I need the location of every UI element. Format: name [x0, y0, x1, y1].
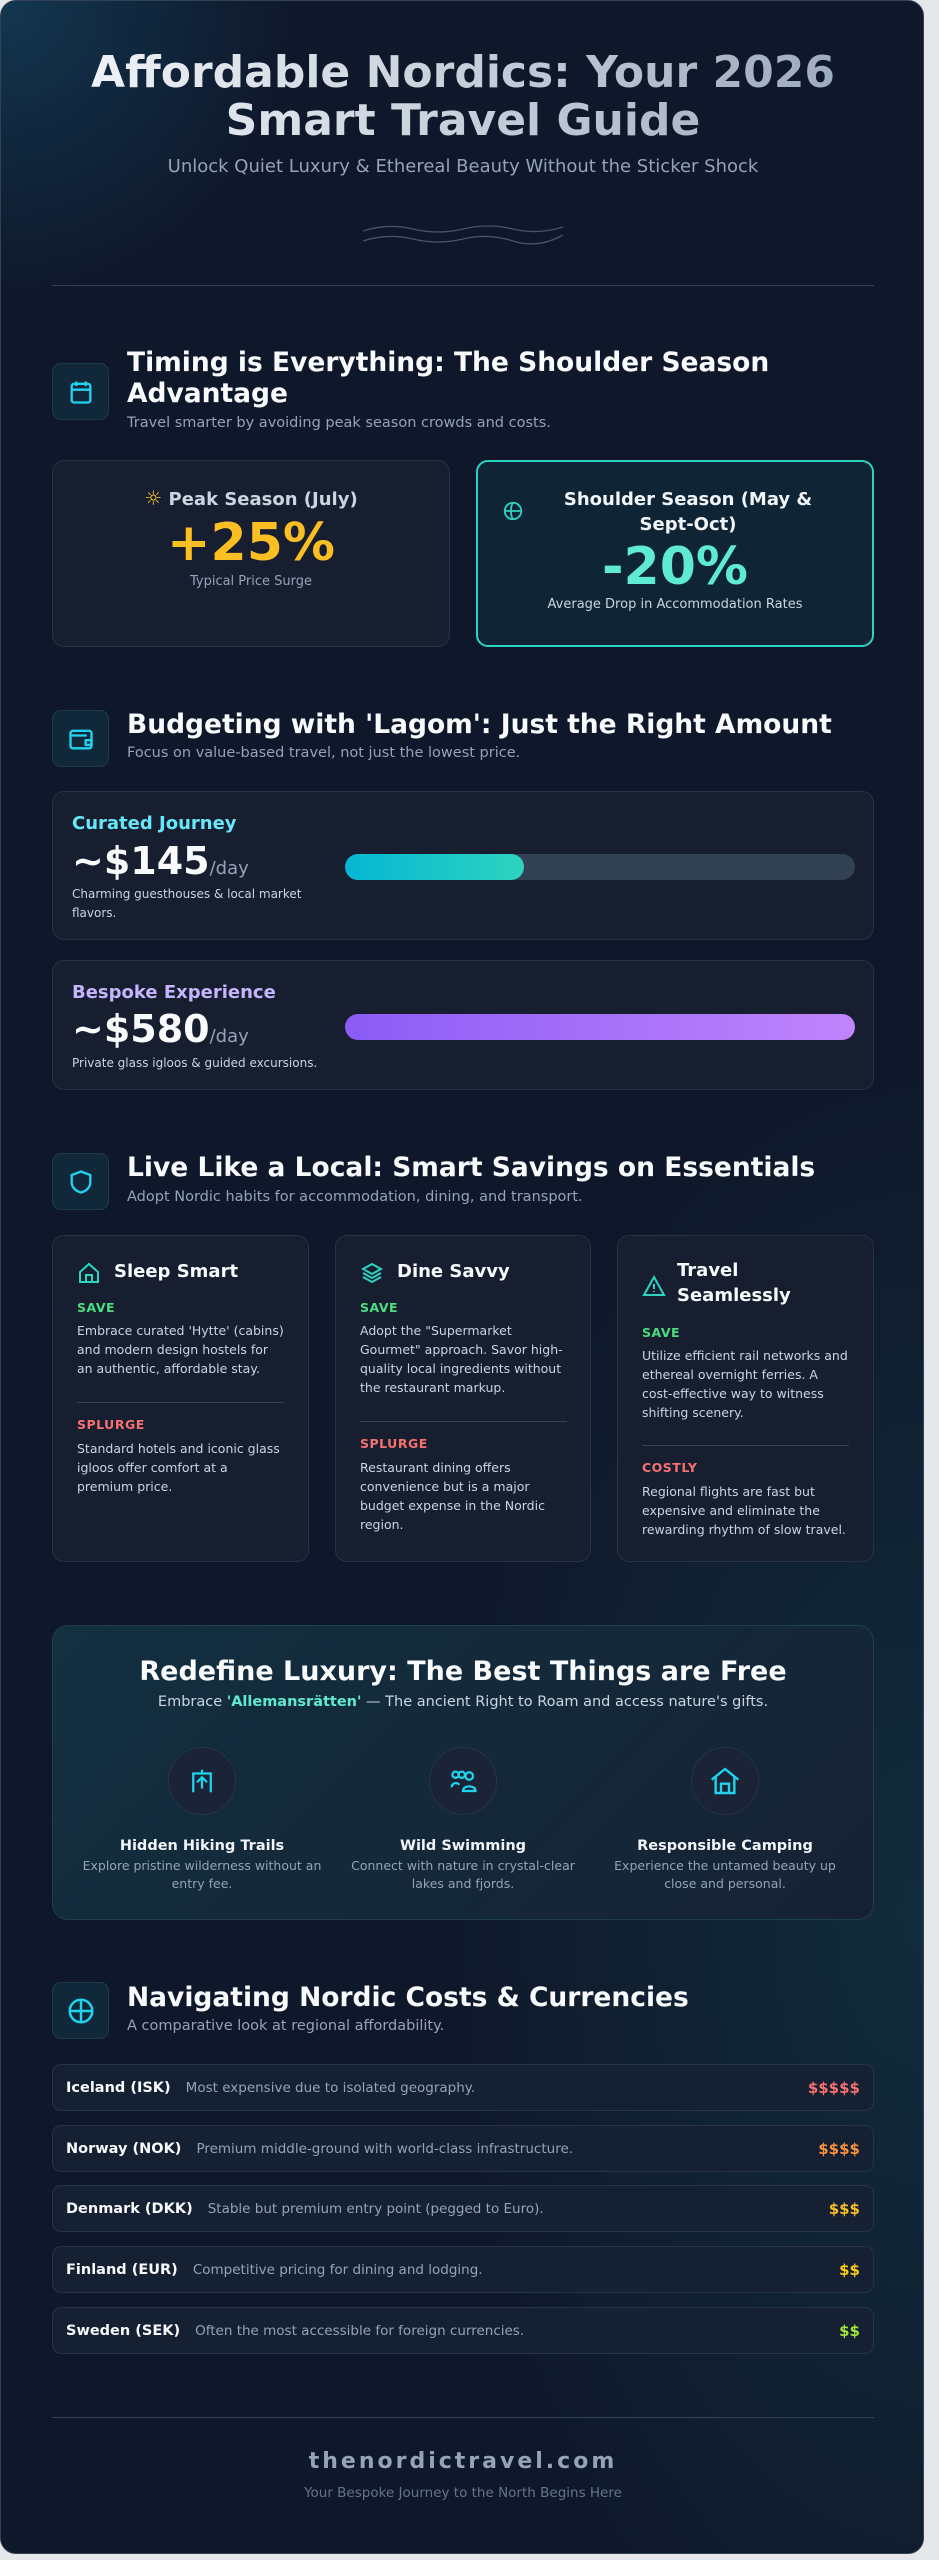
panel: peak season	[52, 460, 450, 647]
item: hiking: Explore pristine wilderness without an entry fee.	[83, 1858, 321, 1891]
panel: redefine luxury	[52, 1625, 874, 1920]
panel: sleep smart: Standard hotels and iconic glass	[77, 1441, 280, 1456]
panel: travel seamlessly	[617, 1235, 874, 1562]
section 5 icon: compass	[52, 1982, 109, 2039]
row: denmark: $$$	[829, 2200, 860, 2218]
panel: bespoke experience: Bespoke Experience	[72, 982, 276, 1003]
bar chart: curated	[345, 854, 855, 880]
section 5 subtitle: A comparative look at regional affordability.	[127, 2018, 444, 2034]
bar chart: bespoke	[345, 1014, 855, 1040]
title: Smart Travel Guide	[226, 95, 700, 146]
section 5 heading: Navigating Nordic Costs & Currencies	[127, 1982, 689, 2013]
row: denmark: Stable but premium entry point (pegged to Euro).	[208, 2200, 544, 2216]
row: denmark: Denmark (DKK)	[66, 2200, 193, 2216]
row: finland: $$	[839, 2260, 860, 2278]
panel: travel seamlessly: Regional flights are fast but expensive and eliminate the rewarding rhythm of slow travel.	[642, 1484, 846, 1537]
panel: sleep smart: Embrace curated 'Hytte' (cabins) and modern design hostels for	[77, 1323, 284, 1357]
panel: sleep smart: premium price.	[77, 1479, 172, 1494]
section 1 icon: calendar	[52, 363, 109, 420]
panel: dine savvy: Adopt the "Supermarket Gourmet" approach. Savor high-quality local ingredients without the restaurant markup.	[360, 1323, 563, 1395]
item: swimming	[351, 1747, 575, 1891]
panel: travel seamlessly: COSTLY	[642, 1460, 697, 1475]
panel: dine savvy	[335, 1235, 591, 1562]
item: camping	[614, 1747, 836, 1891]
panel: travel seamlessly: SAVE	[642, 1325, 680, 1340]
item: swimming: Connect with nature in crystal-clear lakes and fjords.	[351, 1858, 575, 1891]
footer domain: thenordictravel.com	[309, 2449, 617, 2474]
row: sweden: Often the most accessible for foreign currencies.	[195, 2322, 524, 2338]
item: hiking: Hidden Hiking Trails	[120, 1838, 284, 1854]
panel: curated journey	[52, 791, 874, 940]
row: iceland: $$$$$	[808, 2078, 860, 2096]
panel: dine savvy: Restaurant dining offers convenience but is a major budget expense in the Nordic region.	[360, 1460, 545, 1532]
row: norway: $$$$	[818, 2140, 860, 2158]
panel: dine savvy: SAVE	[360, 1300, 398, 1315]
panel: redefine luxury: Embrace 'Allemansrätten' — The ancient Right to Roam and access nature's gifts.	[158, 1694, 768, 1710]
peak number: +25%	[167, 513, 335, 573]
panel: dine savvy: Dine Savvy	[397, 1261, 510, 1282]
peak title: ☼ Peak Season (July)	[144, 486, 358, 510]
section 2 icon: wallet	[52, 710, 109, 767]
panel: shoulder season: Average Drop in Accommodation Rates	[548, 597, 802, 612]
row: iceland: Iceland (ISK)	[66, 2080, 171, 2096]
row: sweden	[52, 2307, 874, 2354]
section 2 subtitle: Focus on value-based travel, not just the lowest price.	[127, 745, 520, 761]
section 1 subtitle: Travel smarter by avoiding peak season crowds and costs.	[127, 415, 551, 431]
panel: sleep smart: Sleep Smart	[114, 1261, 238, 1282]
subtitle: Unlock Quiet Luxury & Ethereal Beauty Without the Sticker Shock	[168, 156, 758, 177]
row: sweden: $$	[839, 2322, 860, 2340]
row: denmark	[52, 2185, 874, 2232]
panel: curated journey: Charming guesthouses & local market flavors.	[72, 887, 301, 920]
section 3 icon: shield	[52, 1153, 109, 1210]
item: swimming: Wild Swimming	[400, 1838, 526, 1854]
row: finland: Finland (EUR)	[66, 2262, 178, 2278]
panel: sleep smart	[52, 1235, 309, 1562]
shoulder title: Shoulder Season (May & Sept-Oct)	[564, 489, 812, 535]
title	[1, 49, 925, 145]
row: norway: Norway (NOK)	[66, 2140, 181, 2156]
item: camping: Responsible Camping	[637, 1838, 813, 1854]
panel: curated journey: ~$145/day	[72, 839, 249, 883]
panel: sleep smart: an authentic, affordable stay.	[77, 1361, 260, 1376]
panel: dine savvy: SPLURGE	[360, 1436, 428, 1451]
panel: curated journey: Curated Journey	[72, 813, 237, 834]
panel: travel seamlessly: Travel	[677, 1260, 738, 1281]
panel: travel seamlessly: Seamlessly	[677, 1285, 791, 1306]
shoulder number: -20%	[602, 537, 748, 597]
panel: travel seamlessly: cost-effective way to witness	[642, 1386, 824, 1401]
section 3 heading: Live Like a Local: Smart Savings on Essentials	[127, 1152, 815, 1183]
footer tagline: Your Bespoke Journey to the North Begins Here	[304, 2485, 622, 2501]
panel: sleep smart: SPLURGE	[77, 1417, 145, 1432]
panel: sleep smart: SAVE	[77, 1300, 115, 1315]
row: iceland	[52, 2064, 874, 2111]
title: Affordable Nordics: Your 2026	[91, 47, 835, 98]
panel: sleep smart: igloos offer comfort at a	[77, 1460, 228, 1475]
item: hiking	[83, 1747, 321, 1891]
row: norway	[52, 2125, 874, 2172]
row: finland: Competitive pricing for dining and lodging.	[193, 2262, 483, 2278]
icon: decorative waves	[363, 225, 563, 244]
row: norway: Premium middle-ground with world-class infrastructure.	[196, 2140, 573, 2156]
section 1 heading: Timing is Everything: The Shoulder Season Advantage	[127, 347, 769, 409]
icon: globe leaf	[504, 502, 522, 520]
row: finland	[52, 2246, 874, 2293]
panel: travel seamlessly: Utilize efficient rail networks and	[642, 1348, 848, 1363]
panel: bespoke experience	[52, 960, 874, 1090]
panel: travel seamlessly: ethereal overnight ferries. A	[642, 1367, 818, 1382]
panel: travel seamlessly: shifting scenery.	[642, 1405, 744, 1420]
row: iceland: Most expensive due to isolated geography.	[186, 2080, 475, 2096]
item: camping: Experience the untamed beauty up close and personal.	[614, 1858, 836, 1891]
section 3 subtitle: Adopt Nordic habits for accommodation, dining, and transport.	[127, 1189, 583, 1205]
panel: peak season: Typical Price Surge	[190, 574, 312, 589]
section 2 heading: Budgeting with 'Lagom': Just the Right Amount	[127, 709, 832, 740]
luxury heading: Redefine Luxury: The Best Things are Free	[139, 1656, 787, 1687]
panel: shoulder season	[476, 460, 874, 647]
row: sweden: Sweden (SEK)	[66, 2322, 180, 2338]
panel: bespoke experience: Private glass igloos & guided excursions.	[72, 1056, 317, 1070]
panel: bespoke experience: ~$580/day	[72, 1007, 249, 1051]
